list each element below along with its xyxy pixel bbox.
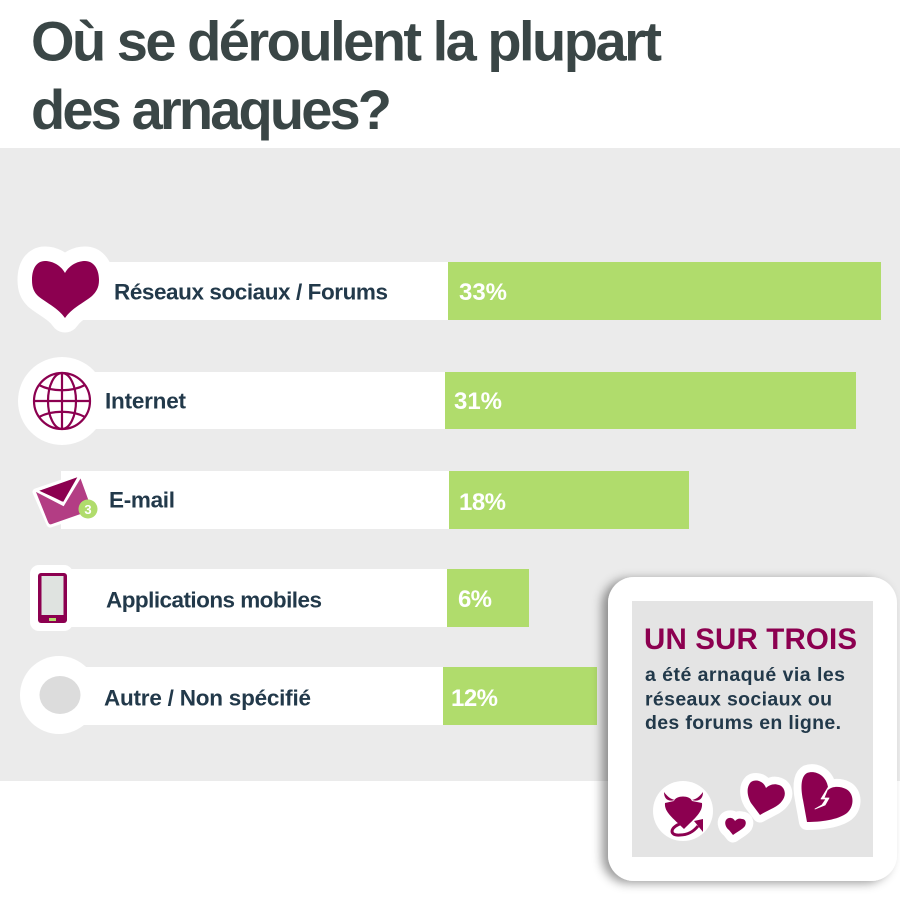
row: internet [18,357,856,445]
callout card [608,577,897,881]
callout text: réseaux sociaux ou [645,688,832,710]
icon: medium heart [748,780,785,815]
row: autre [20,656,597,734]
callout heading: UN SUR TROIS [644,623,857,656]
title [31,10,662,141]
value: 33%: 33% [459,279,507,306]
icon: heart [32,261,99,318]
icon: devil heart [653,781,713,841]
label: internet: Internet [105,388,186,414]
row: réseaux sociaux [32,261,881,320]
value: 6%: 6% [458,586,492,613]
callout text [645,664,845,734]
icon: phone [38,573,67,623]
label: autre: Autre / Non spécifié [104,686,311,710]
label: e-mail: E-mail [109,488,175,512]
callout text: des forums en ligne. [645,712,841,734]
icon: broken heart [802,772,853,822]
row: e-mail [36,471,689,529]
title: Où se déroulent la plupart [31,10,662,72]
title: des arnaques? [31,78,392,141]
label: réseaux sociaux: Réseaux sociaux / Forums [114,280,388,304]
grey background band [0,148,900,781]
icon: small heart [725,818,746,835]
value: 12%: 12% [451,685,498,712]
value: 18%: 18% [459,489,506,516]
callout text: a été arnaqué via les [645,664,845,686]
value: 31%: 31% [454,388,502,415]
icon: grey circle [40,676,80,714]
label: applications mobiles: Applications mobiles [106,588,322,612]
icon: envelope [36,476,98,524]
row: applications mobiles [30,565,529,631]
icon: globe [34,373,90,429]
icon: envelope: 3 [84,502,92,517]
